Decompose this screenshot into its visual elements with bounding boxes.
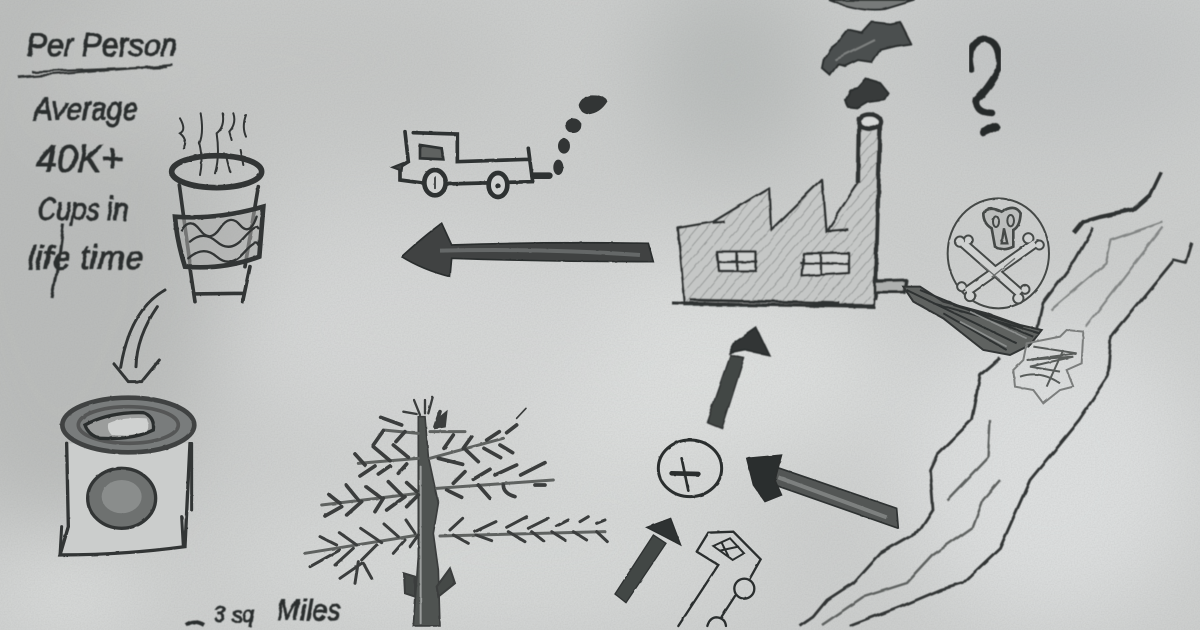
arrow: cup down to can <box>114 290 165 382</box>
factory waste pipe <box>874 280 906 292</box>
factory window left <box>717 252 758 272</box>
icon: smoke clouds <box>822 0 915 108</box>
factory window right <box>800 253 850 276</box>
icon: question mark <box>971 39 999 132</box>
arrow: building to plus <box>615 518 681 603</box>
text: average 40K+ cups in life time: Cups in <box>37 191 128 227</box>
icon: skull and crossbones <box>948 198 1049 308</box>
text: average 40K+ cups in life time: life time <box>28 239 144 276</box>
icon: plus in circle <box>658 440 722 497</box>
icon: steaming coffee cup <box>172 113 263 302</box>
icon: truck with exhaust <box>393 95 607 197</box>
text: average 40K+ cups in life time <box>28 90 144 298</box>
heading: Per Person: Per Person <box>27 27 177 63</box>
text: sq miles <box>186 594 341 627</box>
arrow: river to plus <box>747 455 898 528</box>
waste sludge flowing into river <box>903 287 1042 355</box>
icon: factory <box>672 115 906 307</box>
heading: Per Person <box>18 27 177 77</box>
polluted patch in river <box>1013 330 1083 403</box>
text: sq miles: Miles <box>277 594 341 627</box>
icon: tree <box>305 397 607 626</box>
arrow: plus to factory <box>707 328 769 428</box>
icon: coffee can <box>60 398 194 555</box>
text: average 40K+ cups in life time: Average <box>32 90 138 127</box>
text: sq miles: 3 sq <box>214 602 255 627</box>
icon: factory building with wheels at bottom edge <box>678 532 761 626</box>
text: average 40K+ cups in life time: 40K+ <box>36 138 123 181</box>
arrow: factory to cup (left) <box>402 223 653 277</box>
river <box>800 172 1192 626</box>
